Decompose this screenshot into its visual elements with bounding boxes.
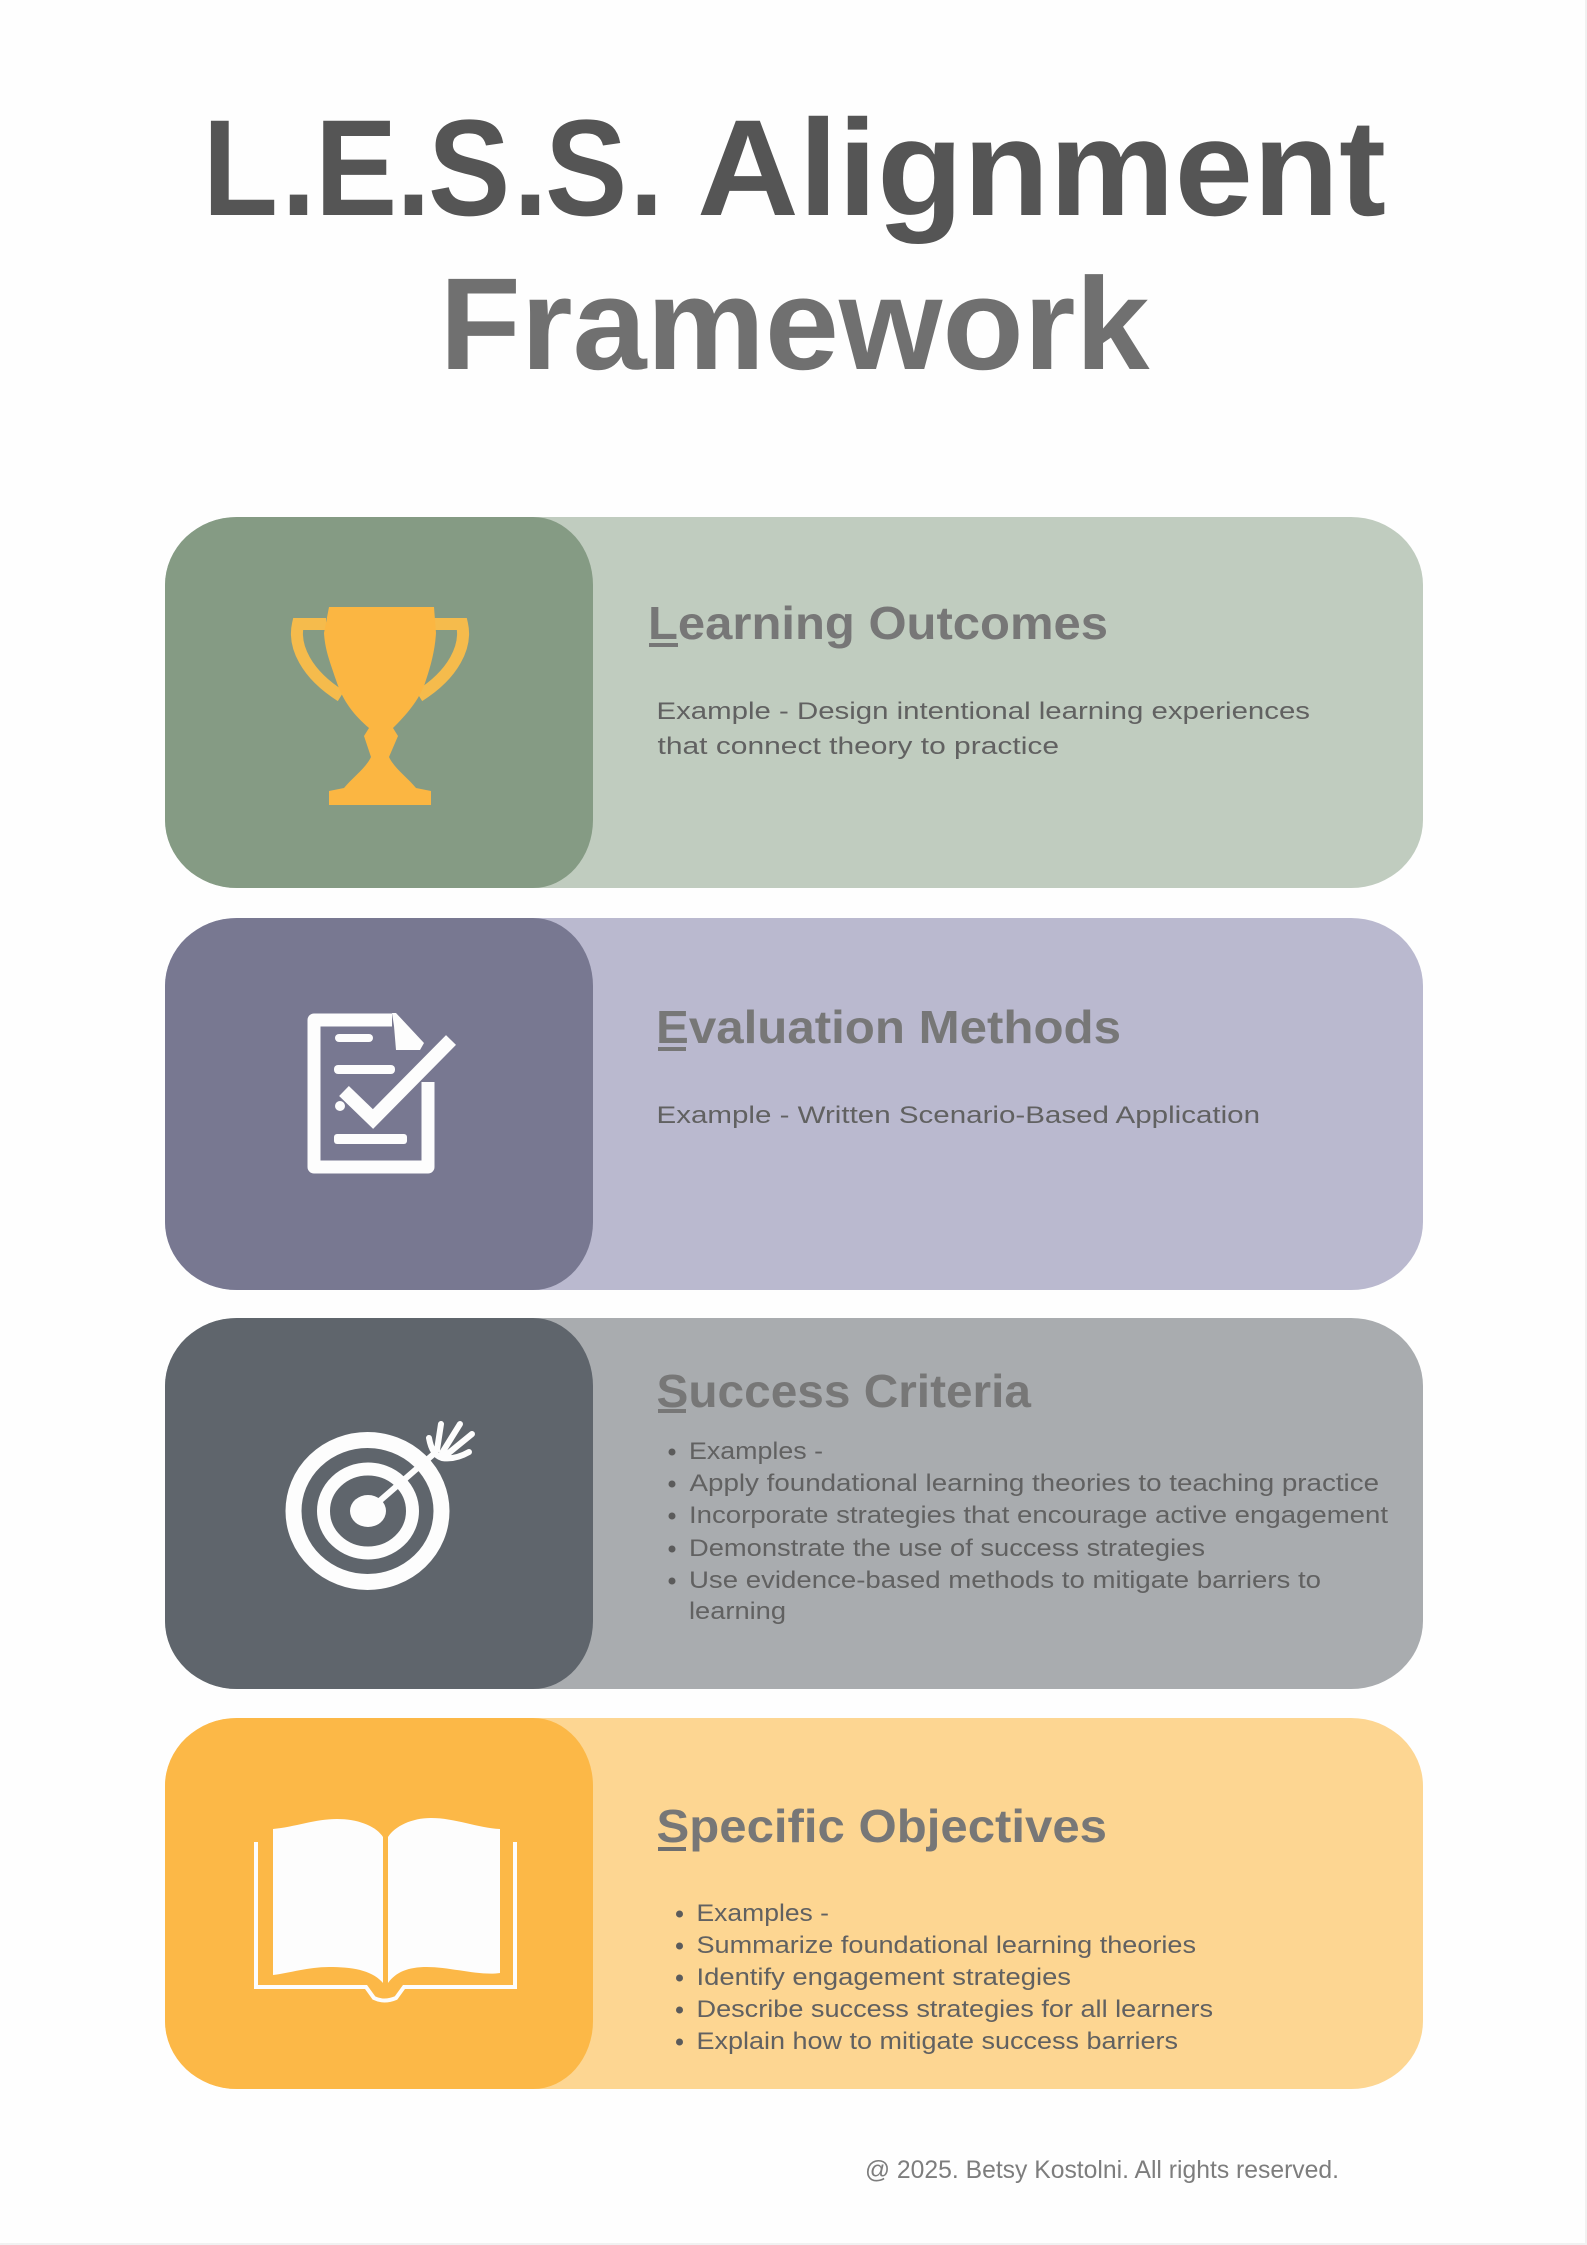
list: specific objectives examples: Summarize foundational learning theories [696,1932,1196,1959]
list: specific objectives examples [676,1900,1213,2055]
list: specific objectives examples: Identify engagement strategies [696,1964,1071,1991]
list: success criteria examples: learning [689,1598,786,1625]
text: learning outcomes example: Example - Design intentional learning experiences [656,698,1310,725]
panel: success criteria [165,1318,1423,1689]
footer: copyright: @ 2025. Betsy Kostolni. All rights reserved. [865,2156,1339,2184]
list: success criteria examples: Use evidence-based methods to mitigate barriers to [689,1567,1321,1594]
title: L.E.S.S. [203,91,664,244]
heading: specific objectives: Specific Objectives [656,1800,1107,1852]
panel: evaluation methods [165,918,1423,1290]
panel: specific objectives [165,1718,1423,2089]
icon: trophy [297,607,463,805]
icon tile: specific objectives [165,1718,593,2089]
icon tile: learning outcomes [165,517,593,888]
list: success criteria examples: Incorporate strategies that encourage active engagement [689,1502,1388,1529]
heading: learning outcomes: Learning Outcomes [648,597,1108,649]
title: Framework [440,250,1150,397]
list: success criteria examples: Apply foundational learning theories to teaching practice [690,1470,1379,1497]
icon: target with arrow [294,1424,472,1582]
text: evaluation methods example: Example - Written Scenario-Based Application [656,1102,1260,1129]
icon tile: success criteria [165,1318,593,1689]
title: Alignment [697,92,1386,245]
title [203,91,1386,397]
list: success criteria examples [668,1438,1388,1625]
heading: success criteria: Success Criteria [656,1365,1031,1417]
list: success criteria examples: Demonstrate the use of success strategies [689,1535,1205,1562]
list: specific objectives examples: Describe success strategies for all learners [696,1996,1213,2023]
list: success criteria examples: Examples - [689,1438,823,1465]
panel: learning outcomes [165,517,1423,888]
icon tile: evaluation methods [165,918,593,1290]
heading: evaluation methods: Evaluation Methods [656,1001,1121,1053]
list: specific objectives examples: Examples - [696,1900,829,1927]
text: learning outcomes example: that connect theory to practice [658,733,1059,760]
icon: open book [256,1818,515,2000]
icon: document with check mark [314,1013,451,1167]
text: learning outcomes example [656,698,1310,760]
list: specific objectives examples: Explain how to mitigate success barriers [696,2028,1178,2055]
